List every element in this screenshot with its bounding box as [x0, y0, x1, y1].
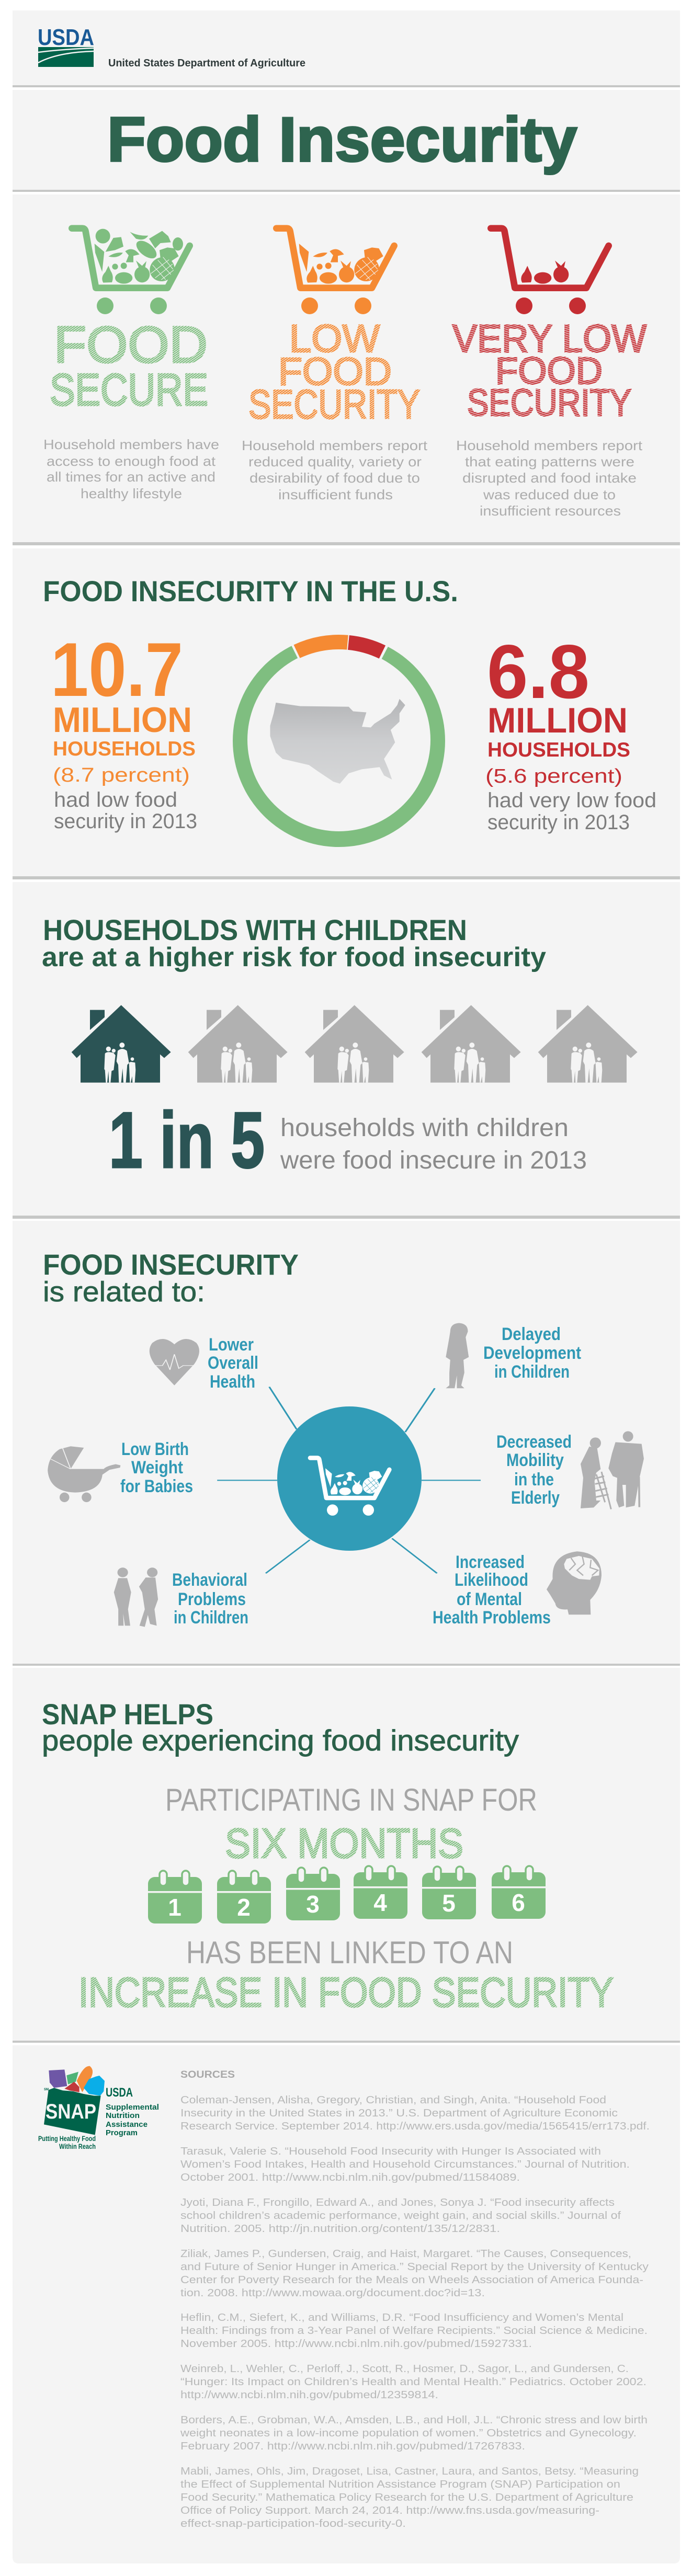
source 6: http://www.ncbi.nlm.nih.gov/pubmed/12359814.	[180, 2389, 438, 2401]
text: six months: SIX MONTHS	[225, 1820, 463, 1867]
source 2: Women’s Food Intakes, Health and Household Circumstances.” Journal of Nutrition.	[180, 2159, 630, 2170]
donut segment: very low food security	[348, 643, 382, 652]
stat: low food security: MILLION	[53, 700, 192, 740]
icon: girl	[446, 1323, 469, 1388]
source 1: Coleman-Jensen, Alisha, Gregory, Christian, and Singh, Anita. “Household Food	[180, 2094, 606, 2106]
label: Lower	[209, 1335, 254, 1355]
source 5: Heflin, C.M., Siefert, K., and Williams, D.R. “Food Insufficiency and Women’s Mental	[180, 2312, 623, 2323]
stat: very low food security	[485, 629, 656, 834]
heading: HOUSEHOLDS WITH CHILDREN	[43, 913, 467, 946]
stat: very low food security: HOUSEHOLDS	[487, 739, 630, 761]
icon: full green cart	[72, 228, 190, 314]
label: Development	[483, 1343, 581, 1363]
title: Food Insecurity	[107, 105, 577, 175]
text: participating in SNAP for: PARTICIPATING IN SNAP FOR	[165, 1782, 537, 1817]
logo text: program name: USDA	[106, 2086, 133, 2100]
label: Decreased	[496, 1432, 572, 1452]
stat caption: households with children	[280, 1114, 569, 1142]
source 2: October 2001. http://www.ncbi.nlm.nih.gov/pubmed/11584089.	[180, 2172, 520, 2183]
calendar 1: 1	[168, 1894, 181, 1921]
map of the United States	[270, 699, 405, 784]
panel: households with children	[13, 882, 680, 1219]
label	[483, 1324, 581, 1382]
label: Elderly	[511, 1488, 560, 1508]
source 1: Research Service. September 2014. http://www.ers.usda.gov/media/1565415/err173.pdf.	[180, 2121, 650, 2132]
label	[120, 1439, 193, 1496]
description: low food security: Household members report	[242, 438, 428, 453]
calendar 2	[217, 1871, 271, 1924]
source 6	[180, 2363, 646, 2401]
hub: circle with cart	[277, 1406, 422, 1551]
panel: header	[13, 10, 680, 87]
description: very low food security	[456, 438, 643, 519]
logo wordmark: SNAP	[46, 2100, 96, 2123]
label: in Children	[174, 1608, 248, 1628]
donut segment: low food security	[297, 642, 347, 651]
source 6: Weinreb, L., Wehler, C., Perloff, J., Scott, R., Hosmer, D., Sagor, L., and Gundersen, C.	[180, 2363, 629, 2375]
item: behavioral problems	[114, 1567, 248, 1628]
column: very low food security	[452, 228, 646, 519]
stat: low food security: HOUSEHOLDS	[53, 738, 196, 760]
source 8: effect-snap-participation-food-security-0.	[180, 2518, 406, 2529]
source 7: February 2007. http://www.ncbi.nlm.nih.gov/pubmed/17267833.	[180, 2441, 525, 2452]
stat caption: were food insecure in 2013	[280, 1147, 587, 1174]
stat: very low food security: 6.8	[487, 629, 589, 714]
source 7	[180, 2414, 648, 2452]
stat: very low food security: had very low food	[487, 789, 656, 812]
source 4: and Future of Senior Hunger in America.” Special Report by the University of Kentucky	[180, 2261, 649, 2273]
calendar 6: 6	[512, 1889, 525, 1916]
column: low food security	[242, 228, 428, 502]
USDA logo	[38, 25, 94, 67]
heading	[43, 1248, 299, 1308]
heading: low food security: SECURITY	[248, 381, 420, 427]
label	[172, 1570, 248, 1628]
source 4: tion. 2008. http://www.mowaa.org/document.doc?id=13.	[180, 2287, 485, 2299]
logo text: program name: Putting Healthy Food	[38, 2134, 96, 2143]
label: Low Birth	[121, 1439, 189, 1459]
stat: low food security: had low food	[54, 788, 177, 811]
source 3: school children’s academic performance, weight gain, and social skills.” Journal of	[180, 2210, 621, 2222]
source 1	[180, 2094, 650, 2132]
heading: low food security: LOW	[289, 317, 380, 360]
heading: low food security: FOOD	[278, 350, 392, 393]
source 3: Nutrition. 2005. http://jn.nutrition.org/content/135/12/2831.	[180, 2223, 500, 2235]
source 1: Insecurity in the United States in 2013.” U.S. Department of Agriculture Economic	[180, 2108, 618, 2119]
label: Health Problems	[433, 1608, 551, 1628]
source 6: “Hunger: Its Impact on Children’s Health and Mental Health.” Pediatrics. October 2002.	[180, 2376, 646, 2388]
item: decreased mobility	[496, 1431, 644, 1509]
heading: food secure: SECURE	[50, 365, 208, 415]
description: food secure: healthy lifestyle	[81, 486, 182, 501]
stat: low food security: security in 2013	[54, 810, 197, 833]
logo text: program name: Assistance	[106, 2120, 148, 2129]
icon: head with brain	[547, 1551, 602, 1615]
calendar 6	[492, 1866, 546, 1919]
source 8: Food Security.” Mathematica Policy Research for the U.S. Department of Agriculture	[180, 2492, 633, 2503]
label: Likelihood	[455, 1570, 528, 1590]
heading: is related to:	[43, 1276, 205, 1308]
SNAP logo	[38, 2066, 159, 2150]
item: low birth weight	[48, 1439, 193, 1502]
label: Delayed	[502, 1324, 561, 1344]
description: very low food security: insufficient resources	[480, 503, 621, 519]
item: delayed development	[446, 1323, 581, 1388]
calendar 4	[354, 1866, 407, 1919]
icons: six calendars	[148, 1866, 546, 1924]
heading: low food security	[248, 317, 420, 427]
text: has been linked to an: HAS BEEN LINKED TO AN	[186, 1935, 513, 1970]
source 5: November 2005. http://www.ncbi.nlm.nih.gov/pubmed/15927331.	[180, 2338, 532, 2350]
stat: low food security	[51, 627, 197, 833]
stat: 1 in 5: 1 in 5	[109, 1096, 265, 1185]
heading: FOOD INSECURITY	[43, 1248, 299, 1281]
panel: sources	[13, 2045, 680, 2563]
heading	[42, 1698, 519, 1757]
heading: food secure	[50, 316, 208, 415]
stat: low food security: 10.7	[51, 627, 183, 712]
heading: very low food security	[452, 317, 646, 424]
calendar 3	[286, 1868, 340, 1920]
panel: SNAP helps	[13, 1668, 680, 2043]
item: lower overall health	[150, 1335, 258, 1392]
icon: two children	[114, 1567, 158, 1627]
source 5	[180, 2312, 648, 2350]
source 4: Ziliak, James P., Gundersen, Craig, and Haist, Margaret. “The Causes, Consequences,	[180, 2248, 631, 2260]
column: food secure	[43, 228, 219, 501]
USDA logo: USDA	[38, 25, 94, 50]
heading: people experiencing food insecurity	[42, 1724, 519, 1757]
panel: food insecurity is related to	[13, 1221, 680, 1666]
label: in Children	[494, 1362, 570, 1382]
calendar 2: 2	[237, 1894, 251, 1921]
icon: elderly couple with walker	[581, 1431, 644, 1509]
heading: FOOD INSECURITY IN THE U.S.	[43, 575, 458, 608]
description: food secure: access to enough food at	[47, 453, 216, 469]
description: food secure	[43, 437, 219, 501]
source 8	[180, 2466, 639, 2529]
label: Increased	[456, 1552, 525, 1572]
label: in the	[514, 1470, 554, 1490]
source 2	[180, 2146, 630, 2183]
label: Health	[210, 1372, 255, 1392]
label: Behavioral	[172, 1570, 247, 1590]
heading: SNAP HELPS	[42, 1698, 213, 1731]
label: Overall	[208, 1353, 258, 1373]
description: food secure: Household members have	[43, 437, 219, 452]
icons: five houses, one highlighted	[72, 1005, 638, 1083]
source 4	[180, 2248, 649, 2299]
calendar 4: 4	[373, 1889, 387, 1916]
source 2: Tarasuk, Valerie S. “Household Food Insecurity with Hunger Is Associated with	[180, 2146, 601, 2157]
source 5: Health: Findings from a 3-Year Panel of Welfare Recipients.” Social Science & Medicine.	[180, 2325, 648, 2337]
description: food secure: all times for an active and	[47, 469, 215, 485]
stat caption	[280, 1114, 587, 1174]
heading: very low food security: FOOD	[495, 350, 603, 392]
source 7: weight neonates in a low-income population of women.” Obstetrics and Gynecology.	[180, 2428, 637, 2439]
label: Mobility	[506, 1450, 564, 1470]
panel: title	[13, 90, 680, 192]
description: low food security: insufficient funds	[278, 487, 393, 502]
label: of Mental	[457, 1589, 522, 1609]
source 8: Office of Policy Support. March 24, 2014. http://www.fns.usda.gov/measuring-	[180, 2505, 599, 2516]
logo text: program name: Supplemental	[106, 2103, 159, 2112]
connector lines	[217, 1387, 481, 1573]
description: low food security: reduced quality, variety or	[248, 454, 422, 470]
donut chart with U.S. map	[233, 635, 445, 847]
icon: half-full orange cart	[276, 228, 394, 314]
source 7: Borders, A.E., Grobman, W.A., Amsden, L.B., and Holl, J.L. “Chronic stress and low birth	[180, 2414, 648, 2426]
label: Weight	[131, 1458, 183, 1478]
label: Problems	[178, 1589, 246, 1609]
calendar 5: 5	[442, 1890, 456, 1917]
source 8: Mabli, James, Ohls, Jim, Dragoset, Lisa, Castner, Laura, and Santos, Betsy. “Measuring	[180, 2466, 639, 2477]
source 3	[180, 2197, 621, 2235]
icon: nearly empty red cart	[491, 228, 609, 314]
logo text: program name: Nutrition	[106, 2111, 140, 2120]
stat: very low food security: MILLION	[487, 701, 628, 740]
description: low food security	[242, 438, 428, 502]
description: very low food security: Household members report	[456, 438, 643, 453]
text: increase in food security: INCREASE IN FOOD SECURITY	[78, 1969, 614, 2016]
label	[496, 1432, 572, 1508]
description: very low food security: disrupted and food intake	[462, 470, 637, 486]
description: very low food security: was reduced due to	[483, 487, 616, 502]
logo artwork: grocery bag	[44, 2066, 105, 2135]
panel: food insecurity in the U.S.	[13, 548, 680, 879]
heading: are at a higher risk for food insecurity	[42, 942, 546, 972]
stat: very low food security: (5.6 percent)	[485, 765, 622, 787]
panel: food security levels	[13, 194, 680, 545]
stat: low food security: (8.7 percent)	[53, 764, 190, 786]
logo text: program name	[38, 2086, 159, 2150]
heading: food secure: FOOD	[54, 316, 208, 373]
calendar 1	[148, 1871, 202, 1924]
sources heading: SOURCES	[180, 2069, 235, 2080]
calendar 5	[422, 1867, 476, 1919]
source 4: Center for Poverty Research for the Meals on Wheels Association of America Founda-	[180, 2274, 643, 2286]
department name: United States Department of Agriculture	[108, 58, 305, 69]
icon: baby stroller	[48, 1446, 120, 1502]
logo text: program name: SM	[44, 2088, 49, 2091]
logo text: program name: Program	[106, 2128, 138, 2137]
label	[433, 1552, 551, 1628]
logo text: program name: Within Reach	[59, 2142, 96, 2150]
calendar 3: 3	[306, 1891, 320, 1918]
heading: very low food security: VERY LOW	[452, 317, 646, 360]
description: very low food security: that eating patterns were	[465, 454, 634, 470]
heading: very low food security: SECURITY	[467, 382, 631, 424]
description: low food security: desirability of food due to	[249, 470, 420, 486]
source 8: the Effect of Supplemental Nutrition Assistance Program (SNAP) Participation on	[180, 2479, 620, 2490]
label	[208, 1335, 258, 1392]
icon: heart	[150, 1339, 199, 1386]
item: mental health problems	[433, 1551, 602, 1628]
heading	[42, 913, 546, 972]
source list	[180, 2094, 650, 2529]
source 3: Jyoti, Diana F., Frongillo, Edward A., and Jones, Sonya J. “Food insecurity affects	[180, 2197, 615, 2208]
label: for Babies	[120, 1476, 193, 1496]
stat: very low food security: security in 2013	[487, 811, 630, 834]
